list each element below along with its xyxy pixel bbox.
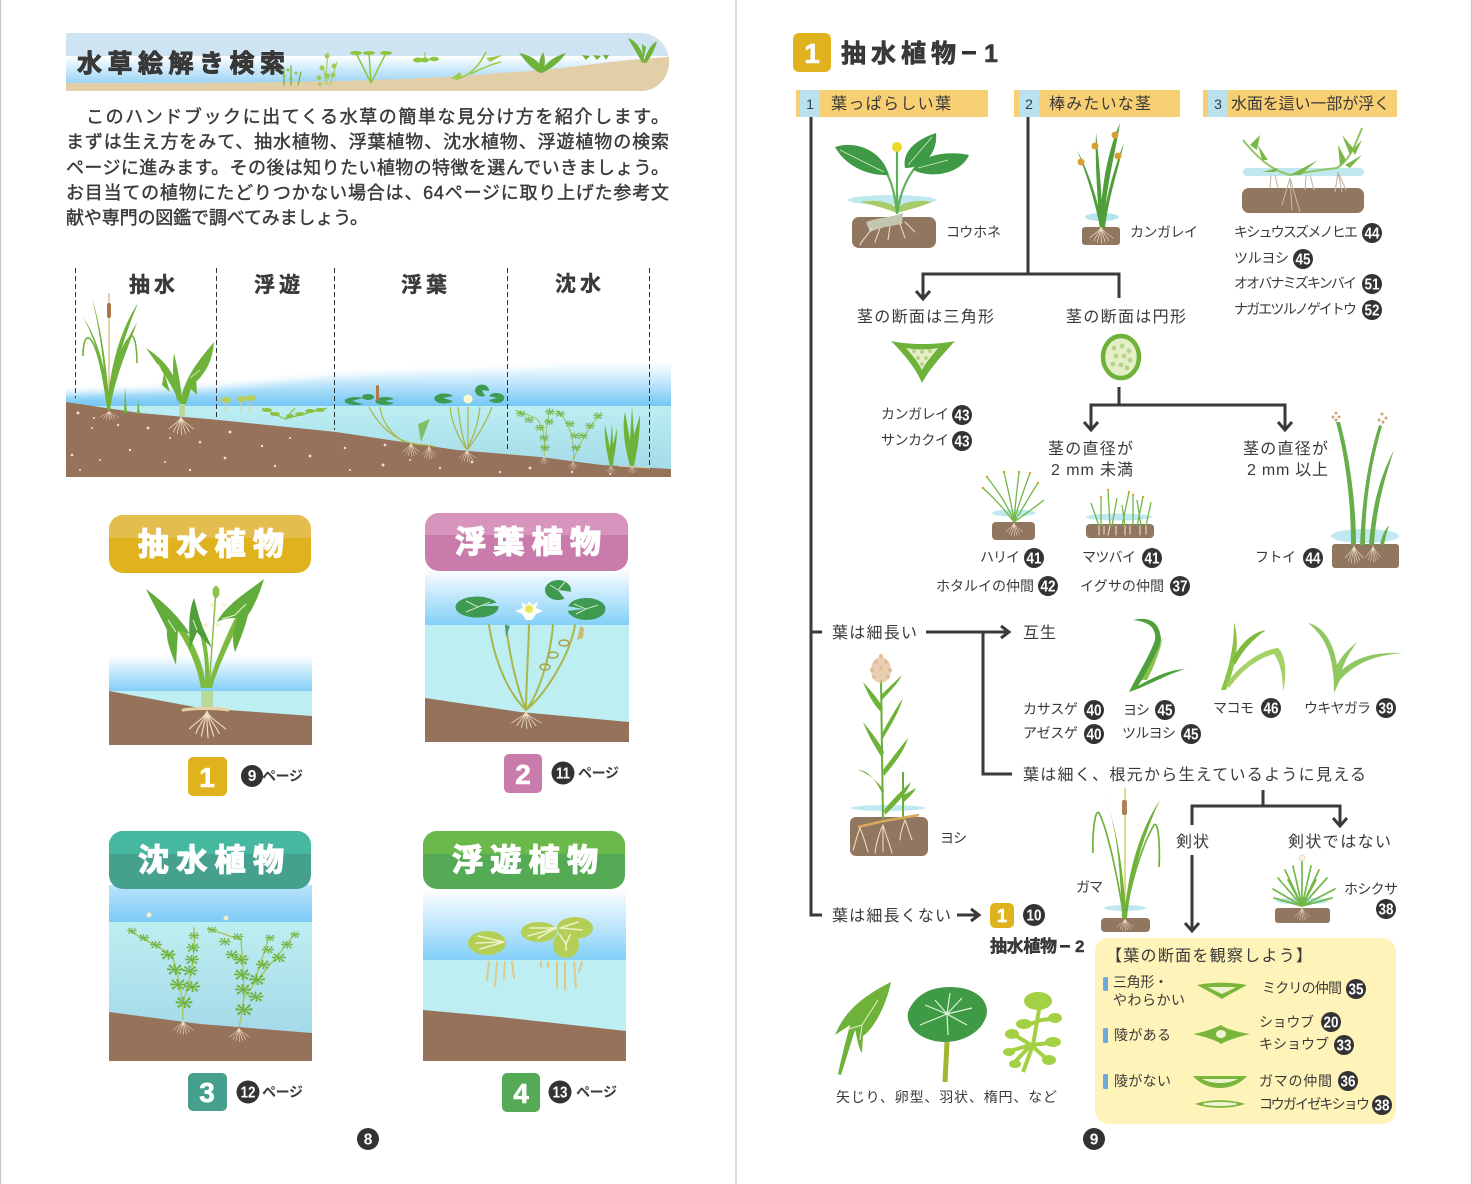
card number and page reference: ページ (262, 1084, 303, 1100)
panel: leaf cross-sections (1095, 938, 1396, 1124)
leaf shape: pinnate (1003, 992, 1062, 1072)
intro paragraph: お目当ての植物にたどりつかない場合は、64ページに取り上げた参考文 (66, 182, 669, 203)
species list: creeping plants (1234, 223, 1382, 320)
species list: creeping plants: 51 (1364, 276, 1380, 294)
card number and page reference: 12 (240, 1084, 256, 1102)
plant: カンガレイ (1077, 123, 1124, 245)
species list: alternate: ウキヤガラ (1304, 700, 1371, 716)
card: emergent plants (109, 515, 312, 796)
left page (50, 33, 671, 1150)
species list: creeping plants: 44 (1364, 226, 1380, 242)
panel title: 【葉の断面を観察しよう】 (1106, 947, 1312, 965)
header: 浮葉植物 (455, 525, 601, 560)
page number 8: 8 (364, 1132, 373, 1148)
zone labels: 浮葉 (401, 274, 447, 297)
water surface band (66, 365, 671, 406)
section title: 1 (984, 40, 998, 68)
label: ホシクサ: 38 (1378, 902, 1394, 918)
species list: stem diameter: マツバイ (1082, 549, 1136, 565)
plant: マツバイ (1086, 489, 1154, 538)
species list: creeping plants: ナガエツルノゲイトウ (1234, 301, 1357, 317)
card number and page reference: ページ (262, 768, 303, 784)
right page (793, 33, 1403, 1150)
card number and page reference: ページ (578, 765, 619, 781)
key header 2: 棒みたいな茎 (1049, 95, 1151, 113)
card number and page reference: 4 (513, 1078, 529, 1109)
species list: stem diameter: 37 (1172, 578, 1188, 596)
label: ホシクサ: ホシクサ (1344, 881, 1398, 897)
row: keeled: ショウブ (1259, 1014, 1314, 1030)
species list: creeping plants: オオバナミズキンバイ (1234, 275, 1357, 291)
card: free-floating plants (423, 831, 626, 1112)
page number 8 (357, 1128, 379, 1150)
species list: creeping plants: 45 (1296, 252, 1311, 268)
species list: triangular: 43 (954, 408, 970, 424)
header: 抽水植物 (138, 527, 284, 562)
key header 1 (796, 90, 988, 117)
card number and page reference: ページ (576, 1084, 617, 1100)
label: alternate: 互生 (1023, 624, 1056, 642)
intro paragraph: このハンドブックに出てくる水草の簡単な見分け方を紹介します。 (86, 106, 669, 127)
species list: alternate: 39 (1378, 700, 1394, 718)
section title (793, 33, 998, 72)
key header 3: 水面を這い一部が浮く (1231, 95, 1390, 113)
plant: arrowhead (146, 342, 214, 435)
label: not sword-shaped: 剣状ではない (1288, 833, 1391, 851)
key header 2 (1014, 90, 1180, 117)
label: 抽水植物-2: 2 (1075, 937, 1084, 956)
label: under 2mm: 茎の直径が (1048, 440, 1133, 458)
water body (66, 406, 671, 470)
plant: ガマ (1093, 788, 1160, 932)
header (109, 831, 311, 889)
header (425, 513, 628, 571)
scene (109, 655, 312, 745)
label: 2mm or over (1243, 440, 1328, 479)
soil specks (71, 412, 611, 475)
label: ヨシ plant: ヨシ (940, 830, 967, 846)
row: triangular soft (1103, 974, 1366, 1008)
species list: alternate: 45 (1184, 726, 1199, 744)
label: コウホネ: コウホネ (946, 224, 1001, 240)
banner title: 水草絵解き検索 (77, 50, 285, 78)
leaf: species A (1129, 619, 1185, 692)
row: keeled: 20 (1324, 1014, 1338, 1032)
scene (423, 889, 626, 1061)
species list: stem diameter: フトイ (1255, 549, 1296, 565)
label: under 2mm (1048, 440, 1133, 479)
row: no keel: 陵がない (1114, 1073, 1171, 1089)
leaf shape: arrowhead (835, 982, 891, 1075)
page number 9 (1083, 1128, 1105, 1150)
zone labels: 沈水 (555, 273, 601, 296)
species list: stem diameter: ハリイ (980, 549, 1020, 565)
scene (109, 885, 312, 1061)
species list: alternate: 45 (1158, 702, 1173, 720)
species list: stem diameter (936, 548, 1323, 596)
label: round stem: 茎の断面は円形 (1066, 308, 1186, 326)
plant: submerged whorled (515, 408, 602, 470)
label: 2mm or over: 茎の直径が (1243, 440, 1328, 458)
species list: stem diameter: 44 (1306, 550, 1321, 568)
card number and page reference (504, 754, 619, 793)
species list: triangular: 43 (954, 434, 970, 450)
zone dividers (76, 268, 650, 466)
card number and page reference: 2 (515, 759, 531, 790)
card number and page reference (188, 1073, 303, 1111)
row: keeled: 33 (1336, 1038, 1352, 1054)
intro paragraph (66, 106, 669, 228)
row: no keel (1103, 1071, 1392, 1115)
scene (425, 568, 629, 742)
species list: stem diameter: ホタルイの仲間 (936, 578, 1034, 594)
species list: stem diameter: イグサの仲間 (1080, 578, 1164, 594)
zone labels: 抽水 (129, 274, 175, 297)
row: triangular soft: やわらかい (1113, 992, 1185, 1008)
species list: alternate: マコモ (1213, 700, 1254, 716)
plant: ヨシ (850, 654, 928, 856)
card number and page reference: 11 (556, 766, 570, 782)
species list: triangular (881, 405, 972, 451)
banner: 水草絵解き検索 (66, 33, 669, 91)
intro paragraph: ページに進みます。その後は知りたい植物の特徴を選んでいきましょう。 (66, 157, 669, 178)
species list: alternate: 40 (1086, 726, 1102, 744)
plant: creeping water plants (1242, 128, 1364, 213)
plant: floating leaf group A (345, 385, 437, 460)
row: keeled: キショウブ (1259, 1036, 1329, 1052)
label: leaf shapes: 矢じり、卵型、羽状、楕円、など (836, 1089, 1057, 1105)
plant illustration (128, 912, 300, 1042)
label: sword-shaped: 剣状 (1176, 833, 1209, 851)
section title: 抽水植物 (841, 40, 956, 68)
row: no keel: コウガイゼキショウ (1259, 1096, 1370, 1112)
key header 3 (1203, 90, 1397, 117)
species list: creeping plants: キシュウスズメノヒエ (1234, 224, 1358, 240)
banner small plants (282, 38, 657, 86)
label: long narrow leaves: 葉は細長い (832, 624, 917, 642)
card number and page reference: 9 (248, 768, 257, 785)
go to page badge: 1 (997, 906, 1007, 926)
section title: 1 (804, 38, 820, 69)
icon: round cross-section (1103, 336, 1139, 378)
zone labels (129, 273, 601, 297)
label: leaves not narrow: 葉は細長くない (832, 907, 951, 925)
row: no keel: 36 (1340, 1074, 1356, 1090)
card number and page reference (188, 757, 303, 796)
plant: submerged grasses (605, 406, 650, 474)
row: keeled: 陵がある (1114, 1027, 1171, 1043)
go to page badge: 10 (1026, 908, 1042, 924)
plant: free floating (221, 395, 327, 419)
card number and page reference: 13 (552, 1084, 568, 1102)
species list: alternate: ヨシ (1123, 702, 1150, 718)
key header 1: 葉っぱらしい葉 (831, 95, 951, 113)
intro paragraph: まずは生え方をみて、抽水植物、浮葉植物、沈水植物、浮遊植物の検索 (66, 131, 669, 152)
species list: creeping plants: 52 (1364, 302, 1380, 320)
leaf shape: round (908, 987, 987, 1082)
species list: alternate: 46 (1264, 700, 1279, 718)
species list: stem diameter: 41 (1026, 550, 1042, 568)
label: narrow basal leaves: 葉は細く、根元から生えているように見える (1023, 766, 1366, 784)
plant: コウホネ (835, 133, 969, 248)
species list: creeping plants: ツルヨシ (1234, 250, 1289, 266)
plant illustration (456, 580, 605, 728)
card number and page reference: 1 (199, 762, 215, 793)
species list: triangular: カンガレイ (881, 406, 949, 422)
species list: alternate: カサスゲ (1023, 701, 1078, 717)
label: 2mm or over: 2 mm 以上 (1247, 461, 1328, 479)
icon: triangular cross-section (891, 341, 955, 383)
label: カンガレイ: カンガレイ (1130, 224, 1198, 240)
plant: floating leaf group B (434, 385, 504, 462)
key header 1: 1 (806, 96, 814, 112)
species list: alternate: アゼスゲ (1023, 725, 1078, 741)
leaf: species C (1308, 623, 1403, 693)
plant illustration (468, 917, 593, 990)
key header 3: 3 (1214, 96, 1222, 112)
key header 2: 2 (1025, 96, 1033, 112)
card number and page reference (502, 1073, 617, 1112)
zone labels: 浮遊 (254, 273, 300, 297)
row: triangular soft: 三角形・ (1113, 974, 1168, 990)
card number and page reference: 3 (199, 1077, 215, 1108)
label: ホシクサ (1344, 881, 1398, 919)
plant: フトイ (1331, 412, 1399, 568)
plant: cattail (83, 293, 140, 420)
row: no keel: 38 (1374, 1098, 1390, 1114)
leaf: species B (1221, 622, 1285, 692)
label: triangular stem: 茎の断面は三角形 (857, 308, 994, 326)
intro paragraph: 献や専門の図鑑で調べてみましょう。 (66, 208, 368, 228)
species list: alternate: 40 (1086, 702, 1102, 720)
species list: stem diameter: 42 (1040, 578, 1056, 596)
header: 浮遊植物 (452, 843, 598, 878)
species list: alternate: ツルヨシ (1122, 725, 1176, 741)
page number 9: 9 (1090, 1132, 1099, 1148)
label: ガマ: ガマ (1076, 879, 1103, 895)
flow lines and arrows (811, 117, 1347, 931)
species list: stem diameter: 41 (1144, 550, 1160, 568)
header (423, 831, 625, 889)
card: floating-leaved plants (425, 513, 629, 793)
species list: triangular: サンカクイ (881, 432, 949, 448)
species list: alternate (1023, 698, 1396, 744)
label: under 2mm: 2 mm 未満 (1051, 461, 1133, 479)
plant: ハリイ (982, 471, 1044, 540)
soil (66, 402, 671, 477)
habitat diagram (50, 268, 671, 477)
label: 抽水植物-2: 抽水植物 (990, 937, 1057, 956)
header: 沈水植物 (138, 843, 284, 878)
card: submerged plants (109, 831, 312, 1111)
row: keeled (1103, 1012, 1354, 1055)
row: triangular soft: ミクリの仲間 (1262, 980, 1342, 996)
header (109, 515, 311, 573)
plant: ホシクサ (1273, 855, 1335, 923)
row: triangular soft: 35 (1348, 982, 1364, 998)
plant illustration (146, 579, 264, 738)
go to page badge (990, 903, 1045, 928)
row: no keel: ガマの仲間 (1259, 1073, 1332, 1089)
